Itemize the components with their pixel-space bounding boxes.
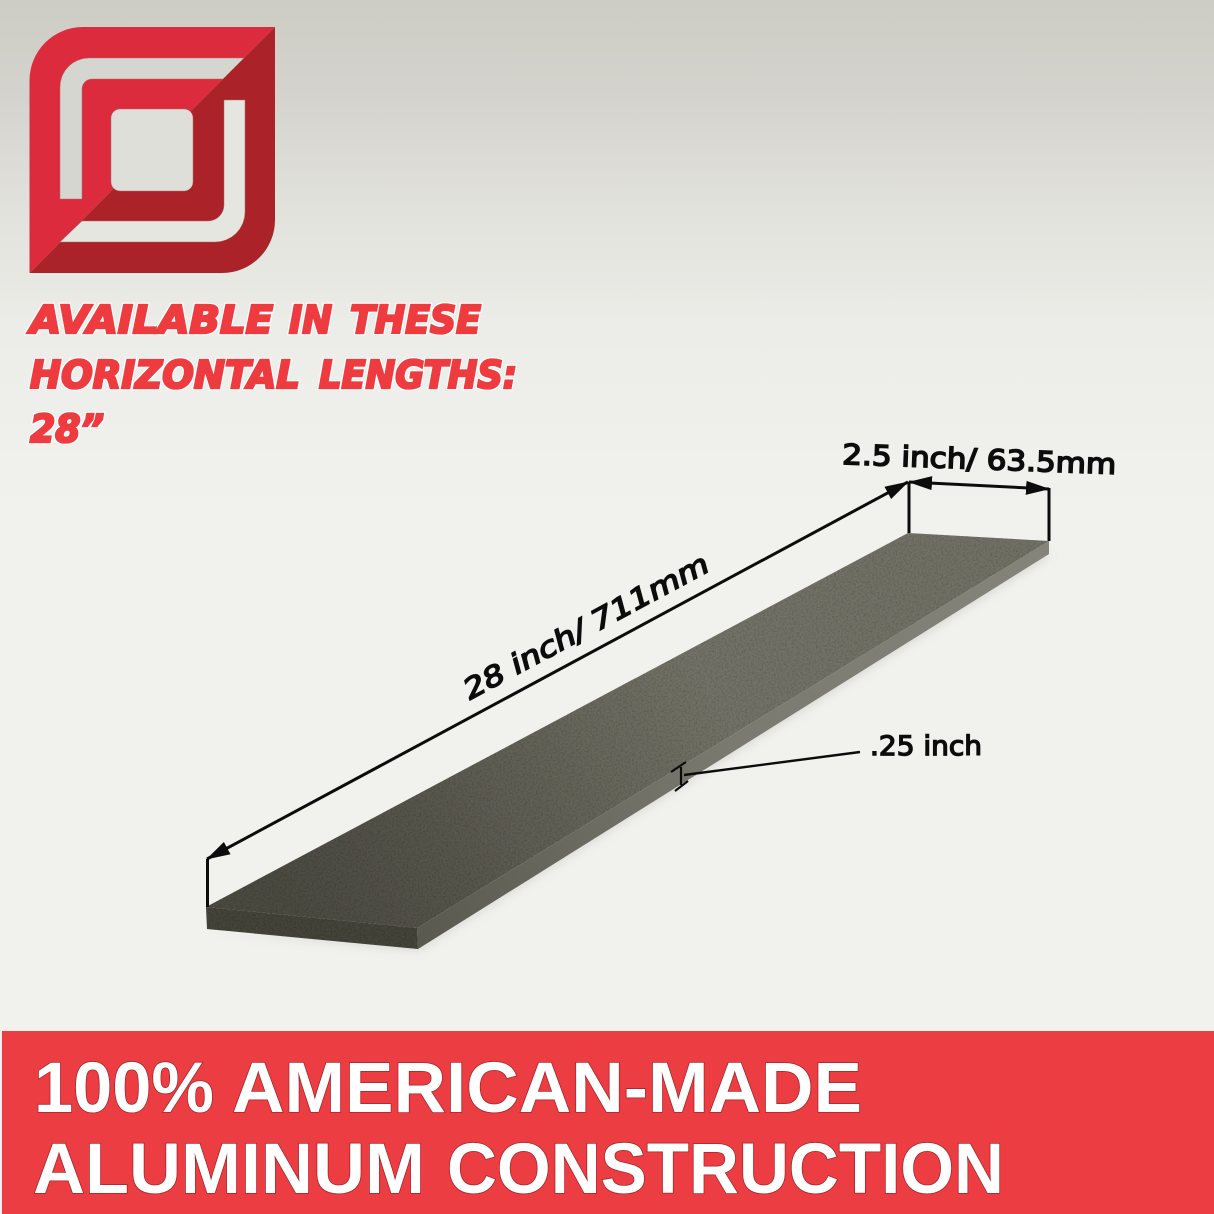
heading: available lengths: 28” (30, 407, 104, 452)
dimension: bar length (207, 482, 908, 907)
heading: available lengths: THESE (350, 298, 481, 343)
banner: CONSTRUCTION (447, 1130, 1004, 1209)
dimension: bar width (842, 438, 1117, 541)
heading: available lengths: IN (289, 298, 332, 343)
logo (30, 27, 275, 273)
aluminum bar (206, 533, 1049, 950)
heading: available lengths: HORIZONTAL (30, 353, 300, 398)
dimension: bar thickness (671, 731, 982, 791)
dimension: bar length: 28 inch/ 711mm (458, 547, 715, 706)
heading: available lengths (27, 298, 517, 452)
dimension: bar thickness: .25 inch (870, 731, 982, 762)
banner: ALUMINUM (33, 1130, 425, 1209)
heading: available lengths: LENGTHS: (319, 353, 517, 398)
dimension: bar width: 2.5 inch/ 63.5mm (842, 438, 1117, 481)
banner (2, 1031, 1214, 1214)
banner: AMERICAN-MADE (232, 1049, 862, 1128)
banner: 100% (34, 1049, 214, 1128)
heading: available lengths: AVAILABLE (27, 298, 273, 343)
